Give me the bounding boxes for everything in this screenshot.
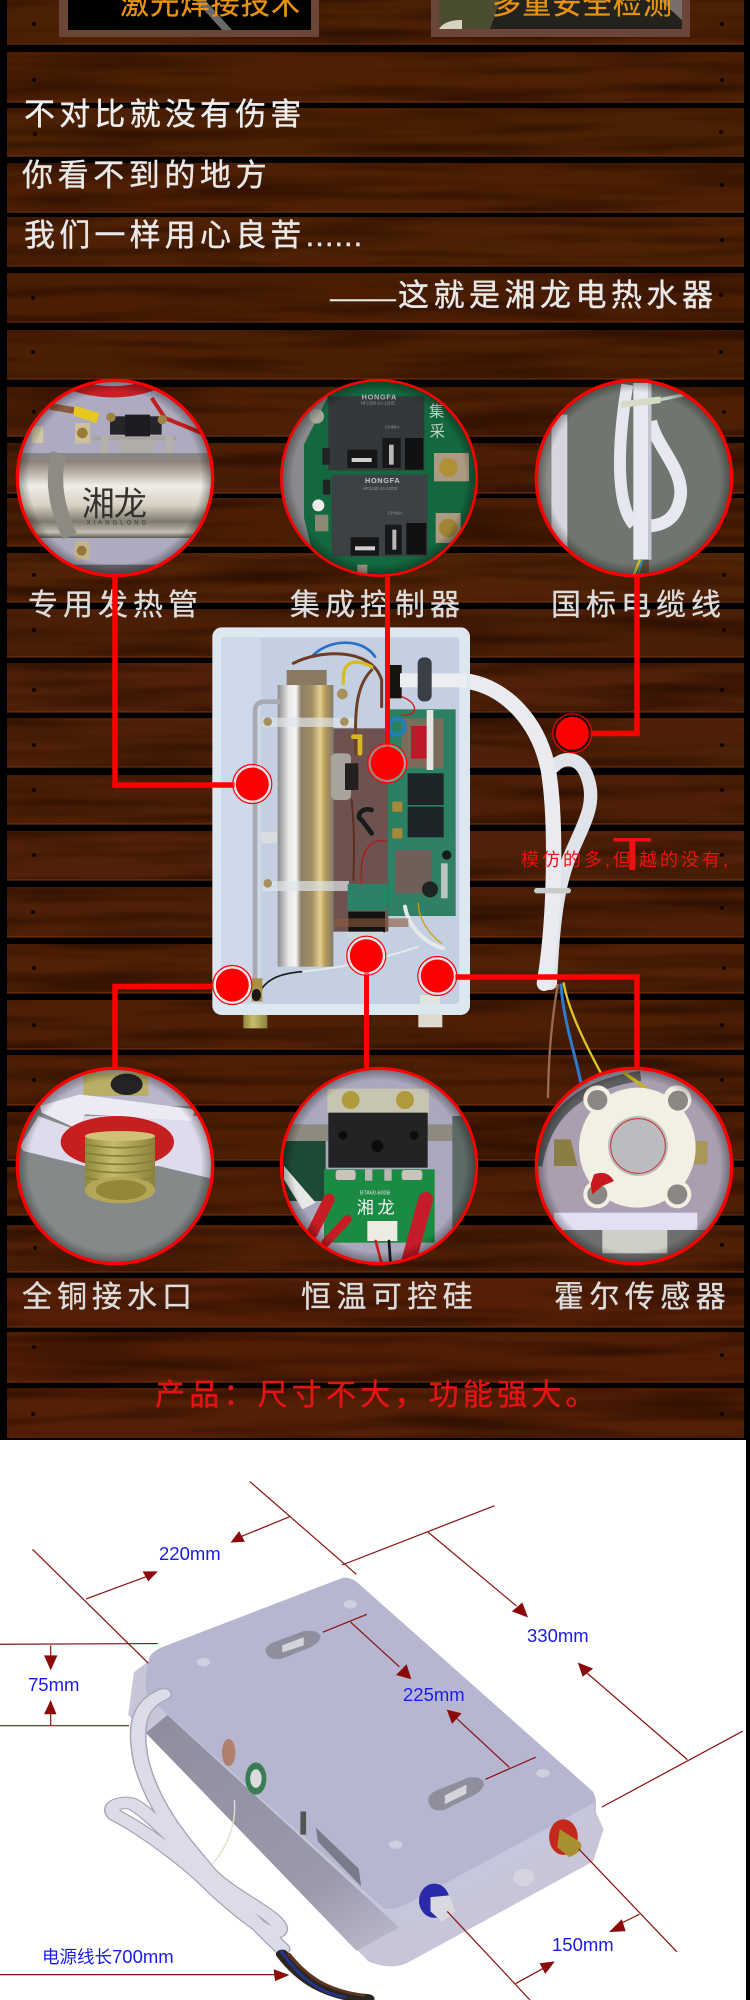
white dimension panel: [0, 1440, 746, 2000]
dimension label: 150mm: 150mm: [552, 1934, 614, 1955]
detail circle: controller relays: HF2160-1A-12DE: [361, 401, 395, 406]
label: heating tube: 专用发热管: [28, 589, 203, 622]
top right banner: safety inspection: [431, 0, 690, 37]
shaded side wall: [146, 1715, 399, 1951]
top left banner: laser welding: [59, 0, 319, 37]
red heading: product small size strong function: 产品：尺寸不大，功能强大。: [155, 1379, 600, 1412]
dimension label: 225mm: 225mm: [403, 1684, 465, 1705]
dimension lines: [0, 1481, 743, 2000]
water connectors: [549, 1819, 578, 1855]
circuit board: [388, 709, 456, 916]
detail circle: controller relays: HF2160-1A-12DE: [363, 486, 398, 491]
power cable: [112, 1694, 368, 1999]
detail circle: controller relays: CHINA: [385, 425, 400, 430]
detail circle: thyristor: 湘龙: [357, 1198, 398, 1218]
detail circle: heating tube: [15, 378, 215, 578]
slogan line 3: 我们一样用心良苦......: [24, 218, 363, 253]
heating tube body: [278, 685, 333, 967]
detail circle: controller relays: 集: [429, 403, 444, 420]
straps: [262, 718, 356, 727]
dimension label: cable length 700mm: 电源线长700mm: [42, 1946, 174, 1967]
body: [146, 1577, 596, 1922]
bottom fittings: [252, 978, 262, 1002]
box shell: [212, 627, 470, 1015]
u pipe: [255, 702, 280, 983]
detail circle: hall sensor: [534, 1066, 734, 1266]
brown backing: [333, 728, 388, 932]
detail circle: controller relays: [279, 378, 479, 578]
detail circle: brass water inlet: [15, 1066, 215, 1266]
detail circle: heating tube: 湘龙: [82, 486, 147, 523]
detail circle: thyristor: [279, 1066, 479, 1266]
label: thermostatic thyristor: 恒温可控硅: [301, 1281, 478, 1314]
terminals: [287, 670, 327, 685]
mounting plates: [265, 1631, 320, 1659]
label: hall sensor: 霍尔传感器: [554, 1281, 731, 1314]
dimension arrowheads: [44, 1531, 626, 1981]
label: integrated controller: 集成控制器: [290, 589, 465, 622]
detail circle: thyristor: BTA60-600B: [360, 1191, 391, 1197]
slogan line 1: 不对比就没有伤害: [24, 97, 306, 132]
detail circle: controller relays: CHINA: [388, 511, 403, 516]
seals and rating label: [222, 1739, 235, 1766]
dimension label: 330mm: 330mm: [527, 1625, 589, 1646]
product exterior: [0, 1481, 743, 2000]
detail circle: controller relays: 采: [430, 423, 445, 440]
detail circle: cable: [534, 378, 734, 578]
marker dots: [213, 714, 592, 1004]
detail circle: controller relays: HONGFA: [365, 476, 400, 485]
detail circle: controller relays: HONGFA: [362, 392, 397, 401]
studs: [343, 1600, 357, 1609]
slogan line 2: 你看不到的地方: [22, 158, 271, 193]
solid state relay: [348, 884, 387, 911]
outer cable: [470, 682, 600, 1097]
callout text: imitators many, none surpass: 越的没有,: [639, 850, 731, 870]
product interior photo: [212, 627, 600, 1097]
slogan line 4: ———这就是湘龙电热水器: [330, 278, 718, 313]
callout text: imitators many, none surpass: [521, 829, 731, 880]
connector lines: [115, 576, 637, 1070]
dimension label: 220mm: 220mm: [159, 1543, 221, 1564]
label: brass water inlet: 全铜接水口: [22, 1281, 197, 1314]
dimension label: 75mm: 75mm: [28, 1674, 79, 1695]
wires: [258, 643, 443, 995]
callout text: imitators many, none surpass: 模仿的多,但: [521, 850, 634, 870]
detail circle: heating tube: XIANGLONG: [87, 521, 149, 527]
label: national standard cable: 国标电缆线: [551, 589, 726, 622]
base plate: [128, 1654, 604, 1966]
wood plank background: [7, 0, 744, 1438]
callout text: imitators many, none surpass: T: [612, 829, 653, 880]
